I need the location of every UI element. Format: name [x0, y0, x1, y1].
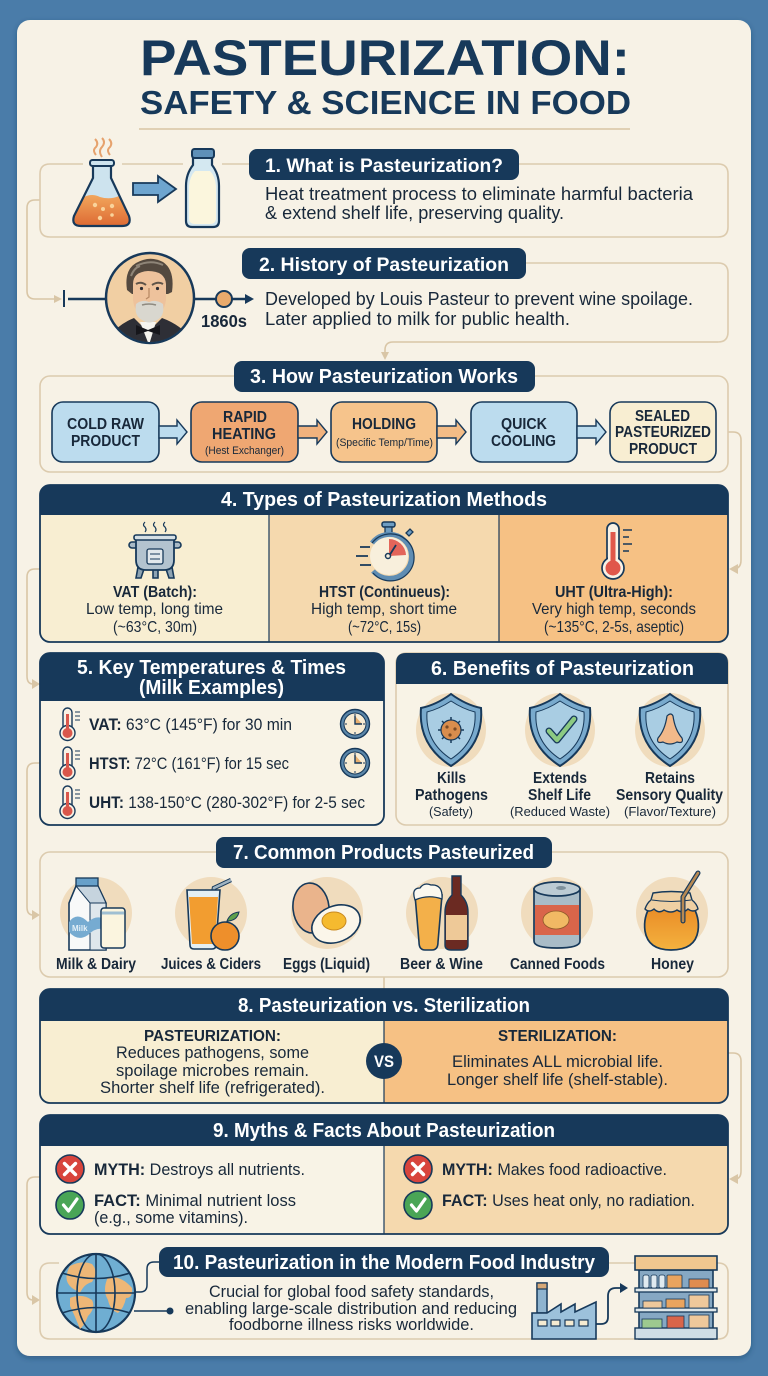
- product: milk and dairy: [56, 877, 136, 973]
- benefit: kills pathogens: [415, 693, 488, 819]
- vs badge: [366, 1043, 402, 1079]
- heading: 6. Benefits of Pasteurization: [431, 658, 694, 680]
- arrow: [159, 420, 187, 444]
- panel: 7 common products pasteurized: [40, 837, 728, 977]
- heading pill: [216, 837, 552, 868]
- row: uht: UHT: 138-150°C (280-302°F) for 2-5 sec: [89, 793, 365, 812]
- fact left: FACT: Minimal nutrient loss: [94, 1191, 296, 1210]
- product: milk and dairy: Milk: [72, 924, 88, 933]
- step: rapid heating: HEATING: [212, 426, 276, 443]
- step: rapid heating: RAPID: [223, 409, 267, 426]
- heading pill: [242, 248, 526, 279]
- text: vat: [86, 584, 223, 636]
- benefit: extends shelf life: [510, 693, 610, 819]
- panel: 5 key temperatures and times: [40, 653, 384, 825]
- row: uht: [60, 786, 365, 818]
- panel: 1 what is pasteurization: [40, 138, 728, 237]
- fact left: [56, 1191, 296, 1227]
- icon: globe: [57, 1254, 135, 1332]
- myth left: [56, 1155, 305, 1183]
- step: sealed pasteurized product: PRODUCT: [629, 441, 697, 458]
- arrow: [298, 420, 327, 444]
- product: honey: [636, 873, 708, 973]
- step: quick cooling: [471, 402, 577, 462]
- heading: 4. Types of Pasteurization Methods: [221, 489, 547, 511]
- text: sterilization: Eliminates ALL microbial life.: [452, 1053, 663, 1071]
- step: sealed pasteurized product: [610, 402, 716, 462]
- fact right: [404, 1191, 695, 1219]
- product: milk and dairy: Milk & Dairy: [56, 956, 136, 973]
- fact left: (e.g., some vitamins).: [94, 1208, 248, 1227]
- body text: Developed by Louis Pasteur to prevent wine spoilage.: [265, 289, 693, 309]
- step: cold raw product: PRODUCT: [71, 433, 140, 450]
- body text: enabling large-scale distribution and reducing: [185, 1300, 517, 1318]
- panel: 3 how pasteurization works: [40, 361, 728, 472]
- panel: 2 history of pasteurization: [64, 248, 728, 345]
- icon: vat pot: [129, 522, 181, 578]
- text: htst: [311, 584, 457, 636]
- step: holding: [331, 402, 437, 462]
- row: vat: VAT: 63°C (145°F) for 30 min: [89, 715, 292, 734]
- text: sterilization: [447, 1028, 668, 1089]
- text: sterilization: Longer shelf life (shelf-stable).: [447, 1071, 668, 1089]
- icon: milk bottle: [186, 149, 219, 227]
- text: pasteurization: Reduces pathogens, some: [116, 1044, 309, 1062]
- step: sealed pasteurized product: PASTEURIZED: [615, 424, 711, 441]
- benefit: kills pathogens: Pathogens: [415, 787, 488, 804]
- icon: arrow flask to bottle: [133, 176, 176, 202]
- myth right: [404, 1155, 667, 1183]
- benefit: retains sensory quality: Sensory Quality: [616, 787, 723, 804]
- step: holding: (Specific Temp/Time): [336, 437, 433, 449]
- benefit: extends shelf life: Shelf Life: [528, 787, 591, 804]
- text: htst: HTST (Continueus):: [319, 584, 450, 601]
- heading pill: 1. What is Pasteurization?: [265, 155, 503, 177]
- icon: store shelf: [635, 1256, 717, 1339]
- date label: 1860s: [201, 311, 247, 331]
- heading: [77, 657, 346, 699]
- myth left: MYTH: Destroys all nutrients.: [94, 1160, 305, 1179]
- body text: Heat treatment process to eliminate harmful bacteria: [265, 184, 694, 204]
- text: pasteurization: PASTEURIZATION:: [144, 1028, 281, 1045]
- body text: [265, 289, 693, 329]
- benefit: kills pathogens: Kills: [437, 770, 466, 787]
- benefit: retains sensory quality: (Flavor/Texture): [624, 804, 716, 819]
- panel: 6 benefits of pasteurization: [396, 653, 728, 825]
- product: juices and ciders: Juices & Ciders: [161, 956, 261, 973]
- row: vat: [60, 708, 370, 740]
- benefit: extends shelf life: (Reduced Waste): [510, 804, 610, 819]
- heading pill: [234, 361, 535, 392]
- body text: Later applied to milk for public health.: [265, 309, 570, 329]
- icon: flask with steam: [73, 138, 130, 226]
- step: holding: HOLDING: [352, 416, 416, 433]
- text: pasteurization: Shorter shelf life (refrigerated).: [100, 1079, 325, 1097]
- heading pill: [159, 1247, 609, 1277]
- myth right: MYTH: Makes food radioactive.: [442, 1160, 667, 1179]
- panel: 10 modern food industry: [40, 1247, 728, 1339]
- arrow: [577, 420, 606, 444]
- step: quick cooling: COOLING: [491, 433, 556, 450]
- text: htst: High temp, short time: [311, 601, 457, 618]
- step: rapid heating: (Hest Exchanger): [205, 445, 284, 457]
- heading pill: [249, 149, 519, 180]
- title: PASTEURIZATION:: [140, 30, 630, 86]
- connector: globe to heading: [134, 1262, 160, 1292]
- text: sterilization: STERILIZATION:: [498, 1028, 617, 1045]
- product: honey: Honey: [651, 956, 694, 973]
- step: quick cooling: QUICK: [501, 416, 548, 433]
- text: vat: Low temp, long time: [86, 601, 223, 618]
- benefit: retains sensory quality: [616, 693, 723, 819]
- step: cold raw product: COLD RAW: [67, 416, 144, 433]
- heading pill: 3. How Pasteurization Works: [250, 366, 518, 388]
- row: htst: HTST: 72°C (161°F) for 15 sec: [89, 754, 289, 773]
- connectors between sections: [27, 200, 741, 1305]
- portrait: Louis Pasteur: [104, 253, 196, 345]
- text: uht: Very high temp, seconds: [532, 601, 696, 618]
- arrow: [437, 420, 466, 444]
- product: beer and wine: Beer & Wine: [400, 956, 483, 973]
- vs badge: VS: [374, 1053, 394, 1071]
- body text: foodborne illness risks worldwide.: [229, 1316, 474, 1334]
- benefit: retains sensory quality: Retains: [645, 770, 695, 787]
- body text: & extend shelf life, preserving quality.: [265, 203, 564, 223]
- text: pasteurization: spoilage microbes remain.: [116, 1062, 309, 1080]
- connector: globe to text: [134, 1308, 174, 1314]
- heading: 9. Myths & Facts About Pasteurization: [213, 1120, 555, 1142]
- title: SAFETY & SCIENCE IN FOOD: [140, 84, 631, 121]
- step: cold raw product: [52, 402, 159, 462]
- text: pasteurization: [100, 1028, 325, 1097]
- heading: 5. Key Temperatures & Times: [77, 657, 346, 679]
- product: eggs: Eggs (Liquid): [283, 956, 370, 973]
- product: canned foods: [510, 877, 605, 973]
- product: juices and ciders: [161, 877, 261, 973]
- row: htst: [60, 747, 370, 780]
- step: sealed pasteurized product: SEALED: [635, 408, 690, 425]
- product: beer and wine: [400, 876, 483, 973]
- icon: factory: [532, 1283, 596, 1339]
- benefit: extends shelf life: Extends: [533, 770, 587, 787]
- step: rapid heating: [191, 402, 298, 462]
- product: canned foods: Canned Foods: [510, 956, 605, 973]
- text: uht: [532, 584, 696, 636]
- body text: [185, 1283, 517, 1334]
- text: uht: UHT (Ultra-High):: [555, 584, 673, 601]
- panel: 8 pasteurization vs sterilization: [40, 989, 728, 1103]
- product: eggs: [283, 877, 370, 973]
- text: vat: (~63°C, 30m): [113, 619, 197, 636]
- fact right: FACT: Uses heat only, no radiation.: [442, 1191, 695, 1210]
- title: [139, 30, 631, 129]
- arrow: factory to shelf: [596, 1283, 628, 1324]
- icon: stopwatch: [356, 522, 414, 581]
- timeline: [64, 290, 254, 307]
- body text: [265, 184, 694, 223]
- panel: 9 myths and facts: [40, 1115, 728, 1234]
- body text: Crucial for global food safety standards,: [209, 1283, 494, 1301]
- benefit: kills pathogens: (Safety): [429, 804, 473, 819]
- heading pill: 2. History of Pasteurization: [259, 254, 509, 276]
- text: vat: VAT (Batch):: [113, 584, 197, 601]
- text: htst: (~72°C, 15s): [348, 619, 421, 636]
- heading: 8. Pasteurization vs. Sterilization: [238, 995, 530, 1017]
- heading: (Milk Examples): [139, 677, 284, 699]
- text: uht: (~135°C, 2-5s, aseptic): [544, 619, 684, 636]
- heading pill: 7. Common Products Pasteurized: [233, 842, 534, 864]
- icon: thermometer: [602, 523, 632, 579]
- panel: 4 types of pasteurization methods: [40, 485, 728, 642]
- heading pill: 10. Pasteurization in the Modern Food Industry: [173, 1252, 596, 1274]
